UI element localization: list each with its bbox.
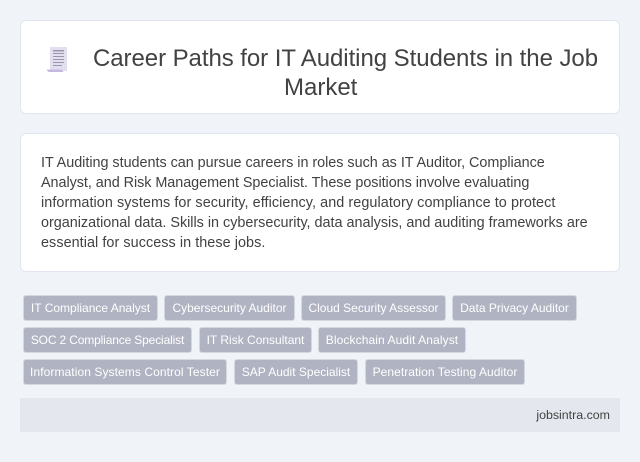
footer source text: jobsintra.com — [536, 408, 610, 422]
tag — [23, 295, 158, 321]
tag: IT Compliance Analyst — [31, 301, 150, 315]
summary text — [41, 155, 588, 251]
tag: Data Privacy Auditor — [460, 301, 569, 315]
title: Career Paths for IT Auditing Students in the Job — [93, 45, 598, 72]
tag: Blockchain Audit Analyst — [326, 333, 458, 347]
summary text: essential for success in these jobs. — [41, 235, 265, 251]
tag: SOC 2 Compliance Specialist — [31, 333, 184, 347]
summary text: Analyst, and Risk Management Specialist. These positions involve evaluating — [41, 175, 529, 191]
tag — [234, 359, 358, 385]
summary text: IT Auditing students can pursue careers in roles such as IT Auditor, Compliance — [41, 155, 545, 171]
tag: Penetration Testing Auditor — [373, 365, 517, 379]
tag — [23, 327, 192, 353]
summary panel — [20, 133, 620, 272]
tag — [199, 327, 312, 353]
tag list — [23, 295, 577, 385]
summary text: organizational data. Skills in cybersecurity, data analysis, and auditing frameworks are — [41, 215, 588, 231]
tag: Cybersecurity Auditor — [172, 301, 287, 315]
tag: Information Systems Control Tester — [30, 365, 220, 379]
title: Market — [284, 74, 357, 101]
tag — [318, 327, 466, 353]
tag — [164, 295, 295, 321]
header panel — [20, 20, 620, 114]
icon: audit document scroll — [47, 47, 67, 72]
tag: SAP Audit Specialist — [242, 365, 350, 379]
tag: IT Risk Consultant — [207, 333, 304, 347]
summary text: information systems for security, efficiency, and regulatory compliance to protect — [41, 195, 555, 211]
title — [93, 45, 598, 101]
tag — [301, 295, 446, 321]
tag — [23, 359, 227, 385]
tag: Cloud Security Assessor — [308, 301, 439, 315]
tag — [452, 295, 577, 321]
footer bar — [20, 398, 620, 432]
tag — [365, 359, 525, 385]
